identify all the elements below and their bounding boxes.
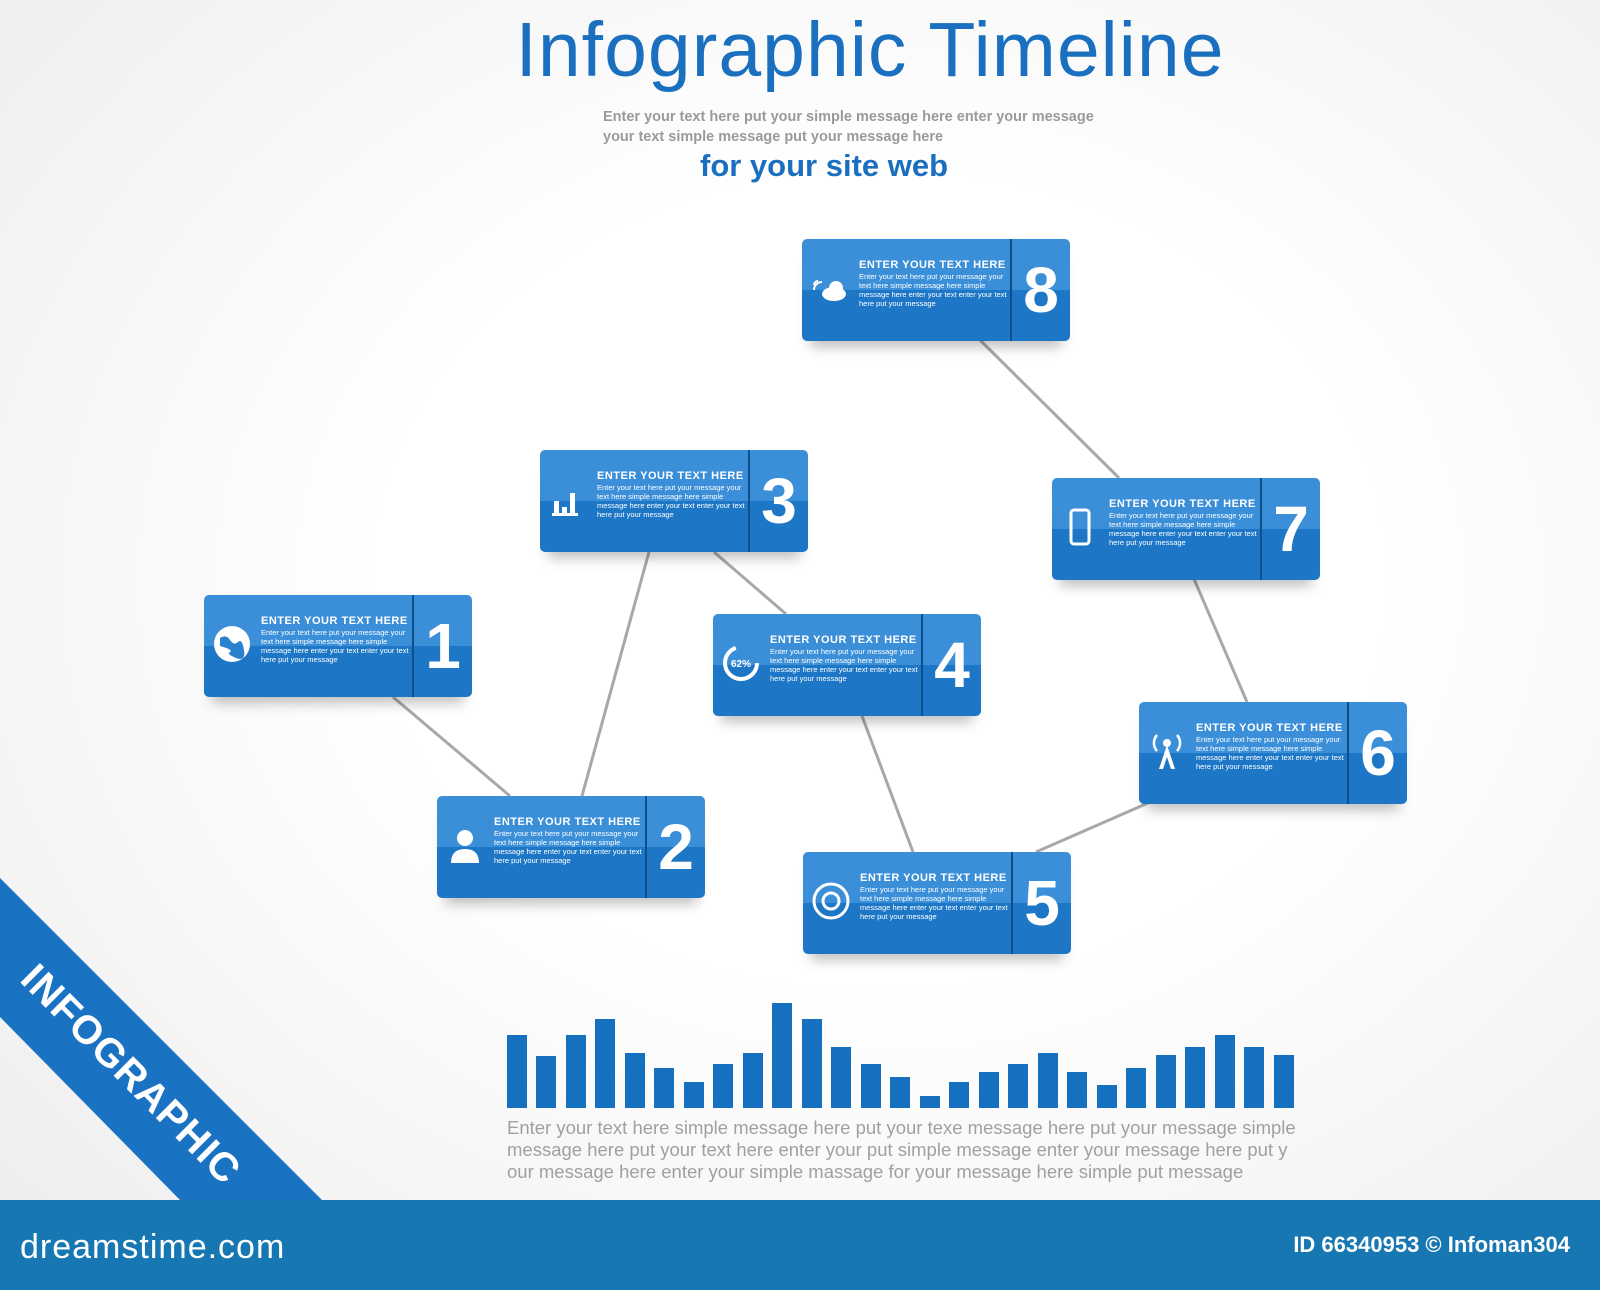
card 5: ENTER YOUR TEXT HERE: [860, 872, 1007, 884]
card 7: Enter your text here put your message your text here simple message here simple message here enter your text enter your text here put your message: [1109, 511, 1257, 547]
card 6: Enter your text here put your message your text here simple message here simple message here enter your text enter your text here put your message: [1196, 735, 1344, 771]
subtitle text: [603, 109, 1094, 145]
card 4: ENTER YOUR TEXT HERE: [770, 634, 917, 646]
card 7: 7: [1273, 493, 1309, 565]
card 4: 4: [934, 629, 970, 701]
card 2: 2: [658, 811, 694, 883]
card 5: 5: [1024, 867, 1060, 939]
card 4: [713, 614, 981, 716]
card 6: ENTER YOUR TEXT HERE: [1196, 722, 1343, 734]
card 8: 8: [1023, 254, 1059, 326]
card 8: [802, 239, 1070, 341]
bottom paragraph: Enter your text here simple message here put your texe message here put your message simple: [507, 1117, 1296, 1138]
footer bar: dreamstime.com: [20, 1228, 285, 1266]
card 6: 6: [1360, 717, 1396, 789]
card 3: ENTER YOUR TEXT HERE: [597, 470, 744, 482]
card 3: Enter your text here put your message your text here simple message here simple message here enter your text enter your text here put your message: [597, 483, 745, 519]
card 1: Enter your text here put your message your text here simple message here simple message here enter your text enter your text here put your message: [261, 628, 409, 664]
card 1: ENTER YOUR TEXT HERE: [261, 615, 408, 627]
card 8: ENTER YOUR TEXT HERE: [859, 259, 1006, 271]
card 5: Enter your text here put your message your text here simple message here simple message here enter your text enter your text here put your message: [860, 885, 1008, 921]
card 8: Enter your text here put your message your text here simple message here simple message here enter your text enter your text here put your message: [859, 272, 1007, 308]
subtitle text: Enter your text here put your simple message here enter your message: [603, 109, 1094, 125]
card 6: [1139, 702, 1407, 804]
bottom paragraph: [507, 1117, 1296, 1182]
bottom paragraph: our message here enter your simple massage for your message here simple put message: [507, 1161, 1243, 1182]
card 3: 3: [761, 465, 797, 537]
card 1: [204, 595, 472, 697]
subheading: for your site web: [700, 148, 948, 183]
ribbon: INFOGRAPHIC: [12, 956, 249, 1193]
footer bar: [0, 1200, 1600, 1290]
ribbon: [0, 878, 322, 1200]
card 2: ENTER YOUR TEXT HERE: [494, 816, 641, 828]
card 7: [1052, 478, 1320, 580]
card 1: 1: [425, 610, 461, 682]
card 2: [437, 796, 705, 898]
title: Infographic Timeline: [515, 7, 1225, 93]
card 4: 62%: [731, 659, 751, 670]
bottom paragraph: message here put your text here enter your put simple message enter your message here put y: [507, 1139, 1288, 1160]
subtitle text: your text simple message put your message here: [603, 129, 943, 145]
card 5: [803, 852, 1071, 954]
card 2: Enter your text here put your message your text here simple message here simple message here enter your text enter your text here put your message: [494, 829, 642, 865]
footer bar: ID 66340953 © Infoman304: [1293, 1232, 1570, 1257]
card 7: ENTER YOUR TEXT HERE: [1109, 498, 1256, 510]
card 4: Enter your text here put your message your text here simple message here simple message here enter your text enter your text here put your message: [770, 647, 918, 683]
card 3: [540, 450, 808, 552]
